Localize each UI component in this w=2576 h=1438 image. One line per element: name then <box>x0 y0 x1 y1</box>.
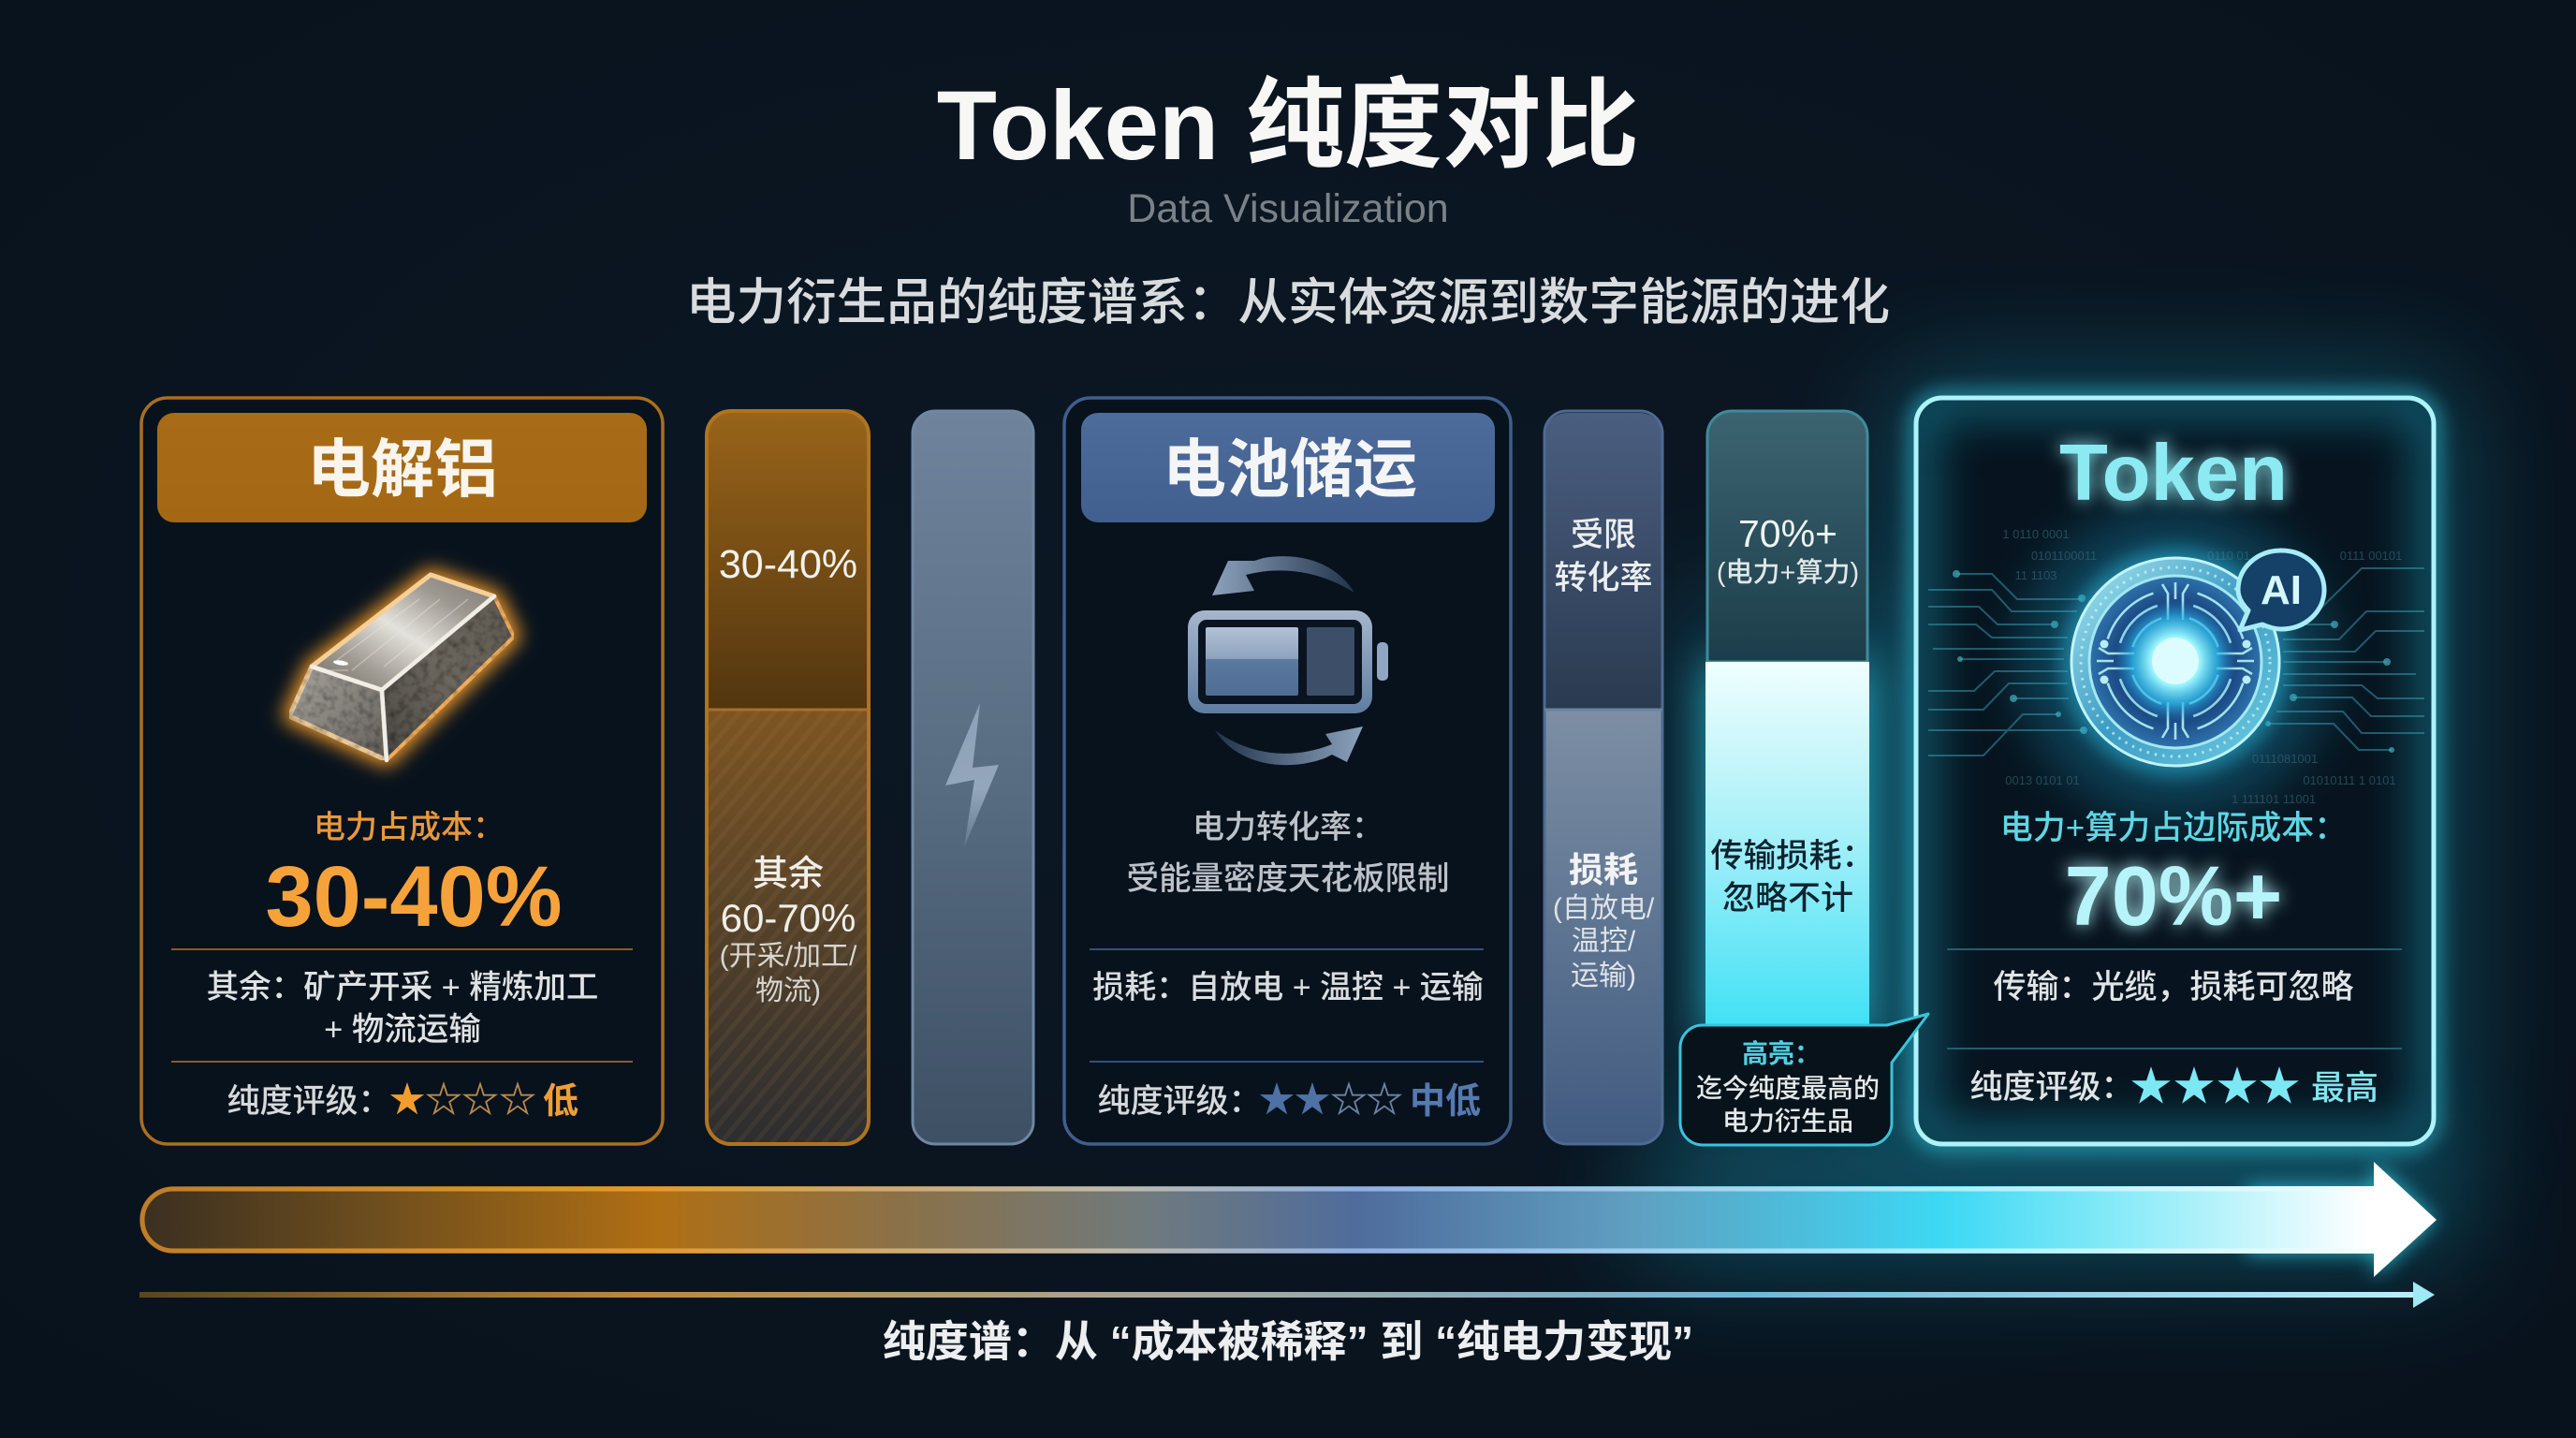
bar label: transmission losses: 传输损耗： <box>1710 838 1875 874</box>
bar label: limited conversion <box>1554 517 1653 596</box>
callout: 迄今纯度最高的 <box>1696 1074 1880 1103</box>
remainder text <box>207 970 598 1048</box>
bar label: losses <box>1553 851 1655 991</box>
divider <box>1090 1061 1484 1063</box>
share label: 电力+算力占边际成本： <box>2000 810 2347 846</box>
bar label: remainder <box>720 855 857 1006</box>
panel 7 heading: Token <box>2059 429 2288 518</box>
binary backdrop: 01010111 1 0101 <box>2303 773 2396 787</box>
bar label: limited conversion: 受限 <box>1571 517 1636 553</box>
circuit nodes <box>1953 570 2394 753</box>
subtitle: Data Visualization <box>1127 186 1449 231</box>
panel 1 heading <box>157 413 647 522</box>
remainder text: 其余：矿产开采 + 精炼加工 <box>207 970 598 1005</box>
bar label: 70 percent: (电力+算力) <box>1717 557 1859 588</box>
icon: AI token coin <box>2061 548 2290 776</box>
conversion note: 受能量密度天花板限制 <box>1127 861 1449 897</box>
callout: 高亮： <box>1742 1039 1821 1068</box>
circuit lines <box>1928 568 2424 756</box>
bar label: limited conversion: 转化率 <box>1554 560 1653 596</box>
binary backdrop: 0110 01 <box>2207 549 2250 563</box>
purity rating: 中低 <box>1410 1082 1481 1122</box>
tagline: 电力衍生品的纯度谱系：从实体资源到数字能源的进化 <box>686 274 1890 330</box>
panel 4 heading <box>1081 413 1495 522</box>
purity rating: 纯度评级： <box>1969 1069 2134 1106</box>
icon: battery with cycle arrows <box>1188 556 1388 765</box>
binary backdrop: 1 111101 11001 <box>2232 792 2316 806</box>
purity rating: 纯度评级： <box>1097 1083 1262 1120</box>
purity rating: 低 <box>543 1082 578 1122</box>
bar label: losses: 运输) <box>1571 961 1636 991</box>
icon: AI speech bubble: AI <box>2261 567 2302 613</box>
bottom caption: 纯度谱：从 “成本被稀释” 到 “纯电力变现” <box>883 1317 1693 1366</box>
bar label: remainder: 其余 <box>753 855 824 894</box>
bar: electricity <box>913 411 1033 1144</box>
panel 4 heading: 电池储运 <box>1163 434 1417 506</box>
binary backdrop: 1 0110 0001 <box>2002 527 2070 541</box>
icon: lightning bolt <box>945 703 999 847</box>
binary backdrop <box>2002 527 2402 806</box>
divider <box>1947 948 2402 950</box>
bar: aluminium cost split <box>707 411 869 1144</box>
divider <box>171 1061 633 1063</box>
transmission text: 传输：光缆，损耗可忽略 <box>1993 969 2354 1005</box>
purity rating <box>227 1082 578 1122</box>
conversion note: 电力转化率： <box>1193 810 1383 845</box>
icon: AI speech bubble <box>2238 550 2324 630</box>
big value: 70%+ <box>2065 850 2282 944</box>
divider <box>1090 948 1484 950</box>
icon: aluminium ingot <box>289 575 514 760</box>
purity rating <box>1097 1082 1481 1122</box>
bar label: remainder: 物流) <box>755 976 821 1006</box>
callout <box>1680 1014 1928 1145</box>
bar label: losses: (自放电/ <box>1553 893 1655 924</box>
purity rating: 纯度评级： <box>227 1083 391 1120</box>
purity rating: 最高 <box>2311 1068 2378 1107</box>
bar label: losses: 温控/ <box>1572 926 1636 957</box>
bar label: 70 percent: 70%+ <box>1738 512 1837 555</box>
bar label: 70 percent <box>1717 512 1859 588</box>
binary backdrop: 0101100011 <box>2031 549 2097 563</box>
bar label: power share: 30-40% <box>719 542 857 587</box>
bar label: losses: 损耗 <box>1569 851 1638 889</box>
panel 1 heading: 电解铝 <box>307 434 498 506</box>
panel: battery storage <box>1064 398 1511 1144</box>
conversion note <box>1127 810 1449 897</box>
binary backdrop: 0111 00101 <box>2340 549 2402 563</box>
title: Token 纯度对比 <box>937 71 1639 181</box>
losses text: 损耗：自放电 + 温控 + 运输 <box>1092 970 1484 1005</box>
cost label: 电力占成本： <box>314 810 505 845</box>
remainder text: + 物流运输 <box>324 1012 481 1048</box>
ambient cyan glow behind token section <box>1638 374 2462 1264</box>
bar label: transmission losses: 忽略不计 <box>1722 880 1853 917</box>
spectrum arrow <box>139 1162 2437 1277</box>
callout: 电力衍生品 <box>1722 1107 1853 1136</box>
bar: token split <box>1705 411 1875 1036</box>
binary backdrop: 0013 0101 01 <box>2005 773 2080 787</box>
divider <box>171 948 633 950</box>
panel: token <box>1916 398 2434 1144</box>
divider <box>1947 1048 2402 1049</box>
binary backdrop: 11 1103 <box>2014 568 2057 582</box>
bar: battery split <box>1544 411 1662 1144</box>
panel: electrolytic aluminium <box>141 398 663 1144</box>
binary backdrop: 0111081001 <box>2252 752 2318 766</box>
purity rating <box>1969 1066 2378 1107</box>
bar label: remainder: (开采/加工/ <box>720 941 857 972</box>
bar label: transmission losses <box>1710 838 1875 917</box>
thin spectrum axis arrow <box>139 1282 2435 1308</box>
bar label: remainder: 60-70% <box>721 896 856 940</box>
big value: 30-40% <box>265 849 563 945</box>
